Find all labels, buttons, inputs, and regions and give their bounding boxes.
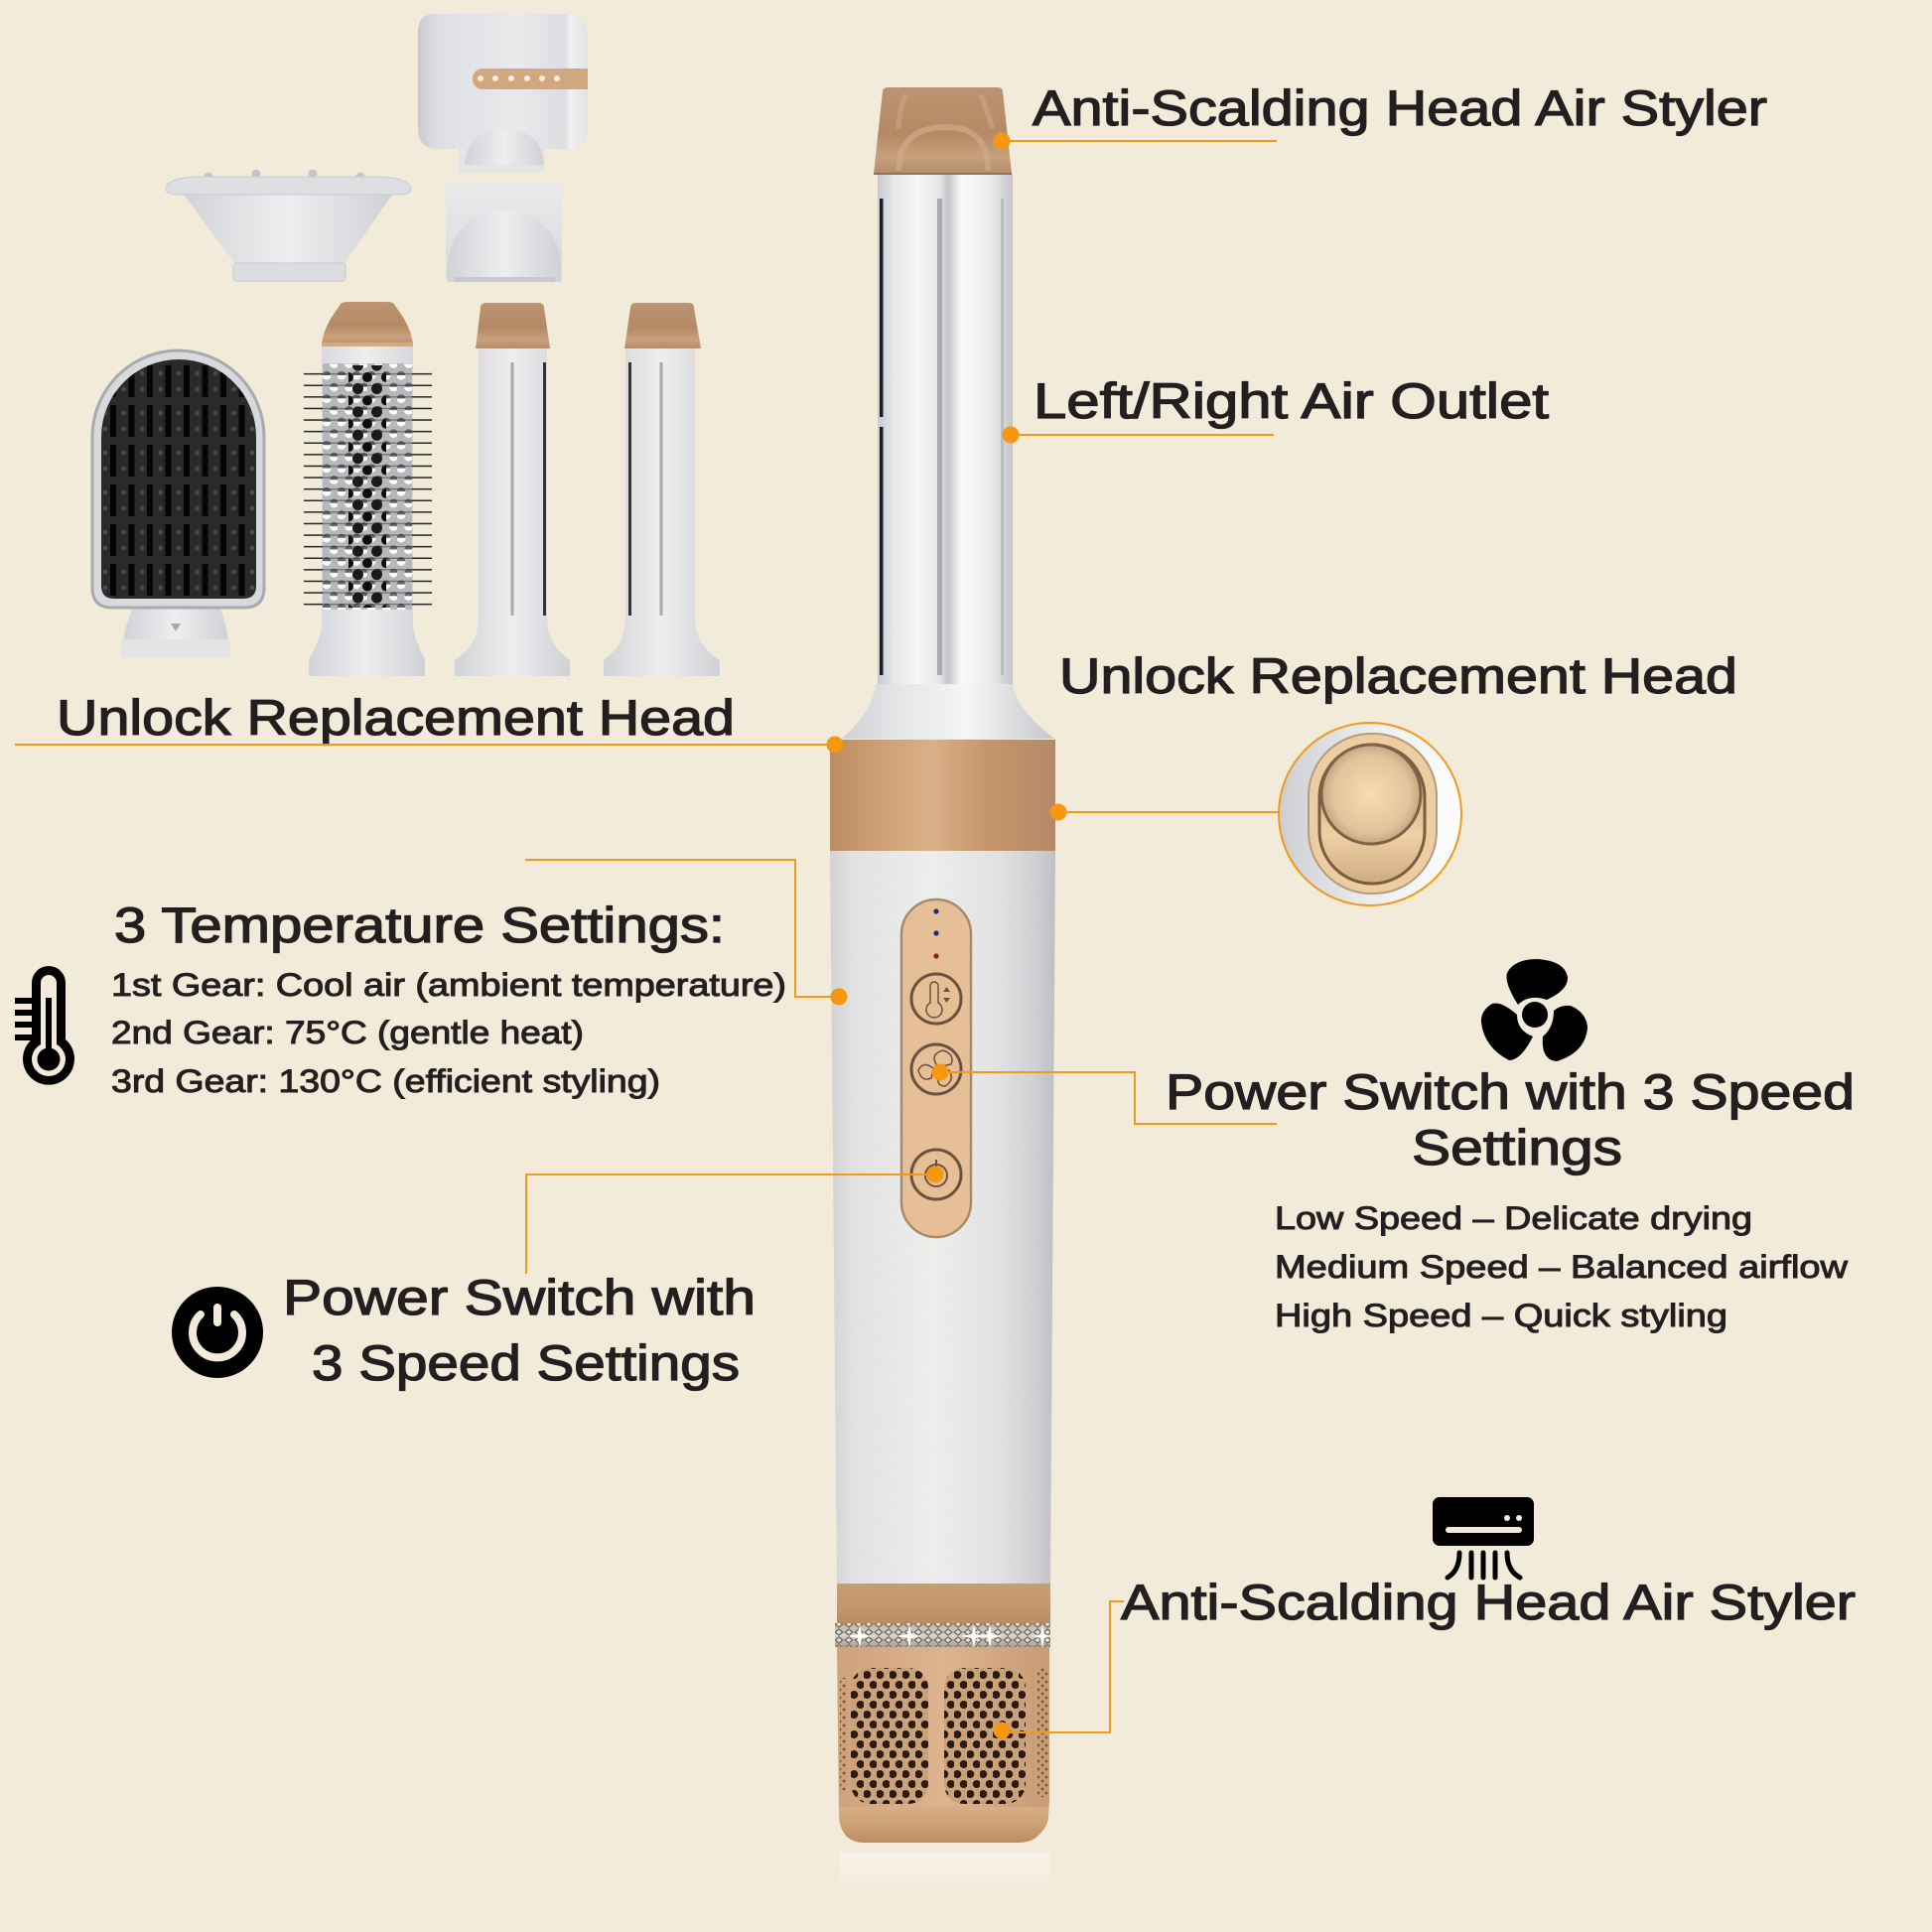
label: Left/Right Air Outlet — [1034, 373, 1549, 429]
label: Power Switch with 3 Speed — [1166, 1064, 1855, 1120]
attachment: diffuser — [166, 169, 411, 281]
gold collar band — [830, 740, 1055, 851]
label: Unlock Replacement Head — [1059, 648, 1737, 704]
device reflection — [839, 1853, 1050, 1896]
control panel — [901, 899, 971, 1237]
lower gold band — [837, 1584, 1050, 1625]
callout: anti-scalding head — [993, 80, 1767, 149]
main air styler device — [830, 87, 1055, 1896]
label: Anti-Scalding Head Air Styler — [1033, 80, 1767, 136]
label — [1166, 1064, 1855, 1175]
attachment: flat brush — [92, 350, 264, 657]
anti-scalding head cap — [874, 87, 1012, 174]
label — [283, 1270, 756, 1391]
neck cone — [842, 684, 1054, 739]
callout: power switch left — [172, 1166, 943, 1391]
leather body — [830, 851, 1055, 1584]
panel: replacement attachments — [92, 14, 720, 676]
icon: thermometer — [15, 966, 74, 1085]
heading: 3 Temperature Settings: — [114, 897, 725, 953]
button: fan — [911, 1044, 961, 1094]
callout: fan speed settings — [931, 959, 1855, 1333]
speed list: High Speed – Quick styling — [1275, 1298, 1727, 1333]
callout: unlock replacement head right — [1050, 648, 1737, 905]
button: power — [911, 1150, 961, 1199]
label: Settings — [1412, 1120, 1622, 1175]
callout: temperature settings — [15, 860, 848, 1099]
callout: left/right air outlet — [1003, 373, 1549, 443]
callout: anti-scalding base — [993, 1497, 1856, 1739]
icon: fan — [1481, 959, 1587, 1061]
icon: air conditioner — [1433, 1497, 1534, 1578]
crystal ring — [835, 1623, 1050, 1648]
attachment: left air nozzle — [455, 303, 570, 676]
speed list: Low Speed – Delicate drying — [1275, 1200, 1752, 1236]
speed list — [1275, 1200, 1849, 1333]
icon: power — [172, 1287, 263, 1378]
leader: unlock replacement head left — [15, 737, 844, 753]
gear list: 1st Gear: Cool air (ambient temperature) — [111, 967, 786, 1003]
air outlet tube — [878, 174, 1013, 690]
attachment: right air nozzle — [604, 303, 720, 676]
vent grill right — [944, 1668, 1026, 1804]
attachment: round bristle brush — [304, 302, 432, 676]
speed list: Medium Speed – Balanced airflow — [1275, 1249, 1849, 1285]
indicator lights — [933, 908, 939, 959]
label: 3 Speed Settings — [312, 1335, 740, 1391]
button: temperature — [911, 974, 961, 1024]
label: Power Switch with — [283, 1270, 756, 1325]
magnified unlock button — [1279, 723, 1461, 905]
attachment: concentrator nozzle — [446, 185, 562, 282]
label: Anti-Scalding Head Air Styler — [1121, 1575, 1856, 1630]
vent grill sliver — [1037, 1668, 1047, 1797]
vent grill left — [851, 1668, 928, 1804]
gear list: 3rd Gear: 130°C (efficient styling) — [111, 1063, 660, 1099]
gear list — [111, 967, 786, 1099]
gear list: 2nd Gear: 75°C (gentle heat) — [111, 1015, 584, 1050]
attachment: hair dryer head — [418, 14, 588, 173]
heading: unlock replacement head left: Unlock Replacement Head — [57, 690, 735, 746]
base with vent grills — [837, 1647, 1049, 1843]
